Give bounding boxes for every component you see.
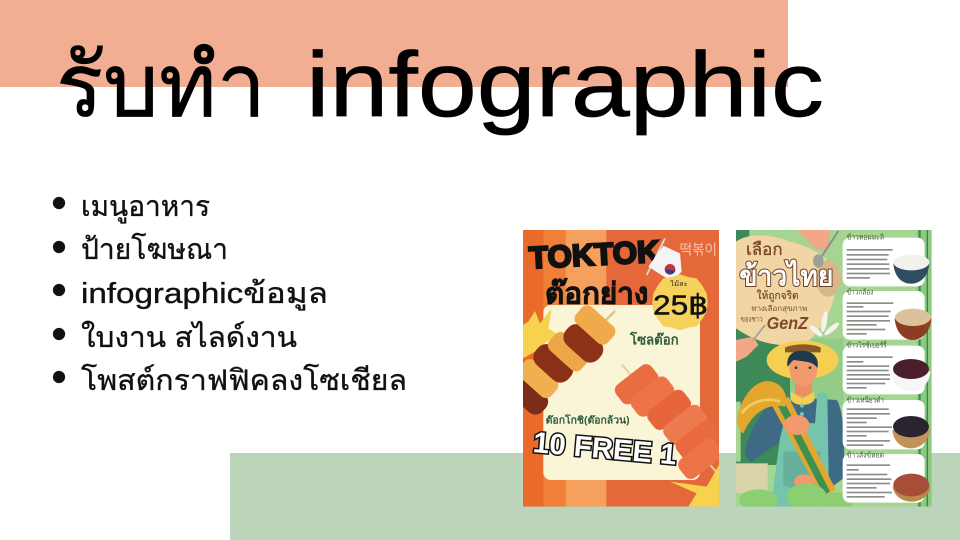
title: รับทำ	[56, 36, 266, 135]
price badge: 25฿	[653, 289, 708, 320]
heading: choose: เลือก	[746, 240, 783, 259]
rice card 5: red rice	[843, 451, 930, 503]
rice card 2: brown rice	[843, 287, 931, 340]
apron	[771, 393, 829, 507]
wheat stalks	[772, 397, 836, 497]
bullet list	[53, 191, 407, 397]
price badge: ไม้ละ	[669, 280, 688, 288]
wheat plumes	[737, 381, 786, 433]
title: infographic	[306, 34, 824, 136]
bushes	[739, 489, 778, 507]
icon: top hand with spoon	[797, 230, 838, 268]
list item: data infographic: infographicข้อมูล	[81, 278, 328, 311]
rice card 1: jasmine	[843, 233, 929, 286]
cream panel	[543, 305, 700, 480]
hand on stalks	[784, 415, 809, 435]
promo: 10 free 1: 10 FREE 1	[532, 426, 678, 472]
heading: grilled tteok: ต๊อกย่าง	[545, 277, 648, 310]
list item: social graphics: โพสต์กราฟฟิคลงโซเชียล	[81, 363, 407, 397]
subheading: of: ของชาว	[741, 315, 763, 324]
collar	[791, 392, 814, 405]
list item: worksheets and slides: ใบงาน สไลด์งาน	[81, 320, 297, 354]
icon: rice grains	[810, 311, 839, 336]
yellow bursts	[523, 308, 558, 358]
korean text: 떡볶이	[680, 241, 717, 257]
list item: ad signs: ป้ายโฆษณา	[81, 232, 228, 266]
beige blob	[736, 235, 836, 345]
heading: toktok: TOKTOK	[528, 235, 660, 275]
rice card 2: brown rice: ข้าวกล้อง	[847, 287, 874, 296]
salmon header band	[0, 0, 788, 87]
skewer: spicy	[614, 364, 719, 479]
farmer illustration	[736, 341, 853, 511]
rice card 1: jasmine: ข้าวหอมมะลิ	[847, 233, 884, 242]
heading: correctly: ให้ถูกจริต	[757, 289, 799, 302]
rice card 5: red rice: ข้าวสังข์หยด	[847, 451, 884, 460]
label: tteok gochi: ต๊อกโกชิ(ต๊อกล้วน)	[546, 414, 630, 427]
heading: thai rice: ข้าวไทย	[739, 260, 833, 292]
subheading: ทางเลือกสุขภาพ	[751, 304, 808, 313]
neck and face	[795, 382, 812, 397]
price badge	[652, 274, 708, 330]
icon: korean flag	[647, 238, 682, 282]
rice card 3: riceberry	[843, 340, 930, 394]
shirt and arms	[745, 397, 844, 486]
poster: thai rice	[736, 230, 932, 511]
list item: menu: เมนูอาหาร	[81, 191, 210, 224]
poster: toktok	[523, 230, 719, 507]
rice card 4: black sticky rice: ข้าวเหนียวดำ	[847, 395, 884, 404]
flowers	[736, 463, 768, 493]
skewer: soy glazed	[523, 305, 616, 414]
rice card 4: black sticky rice	[843, 395, 930, 449]
label: soul tteok: โซลต๊อก	[629, 330, 679, 347]
hat	[767, 341, 839, 379]
rice card 3: riceberry: ข้าวไรซ์เบอร์รี่	[847, 340, 887, 350]
rice sack	[816, 260, 841, 297]
heading: genz: GenZ	[767, 313, 809, 333]
title	[56, 34, 824, 136]
icon: left hand with fork	[736, 325, 765, 362]
green footer band	[230, 453, 960, 540]
